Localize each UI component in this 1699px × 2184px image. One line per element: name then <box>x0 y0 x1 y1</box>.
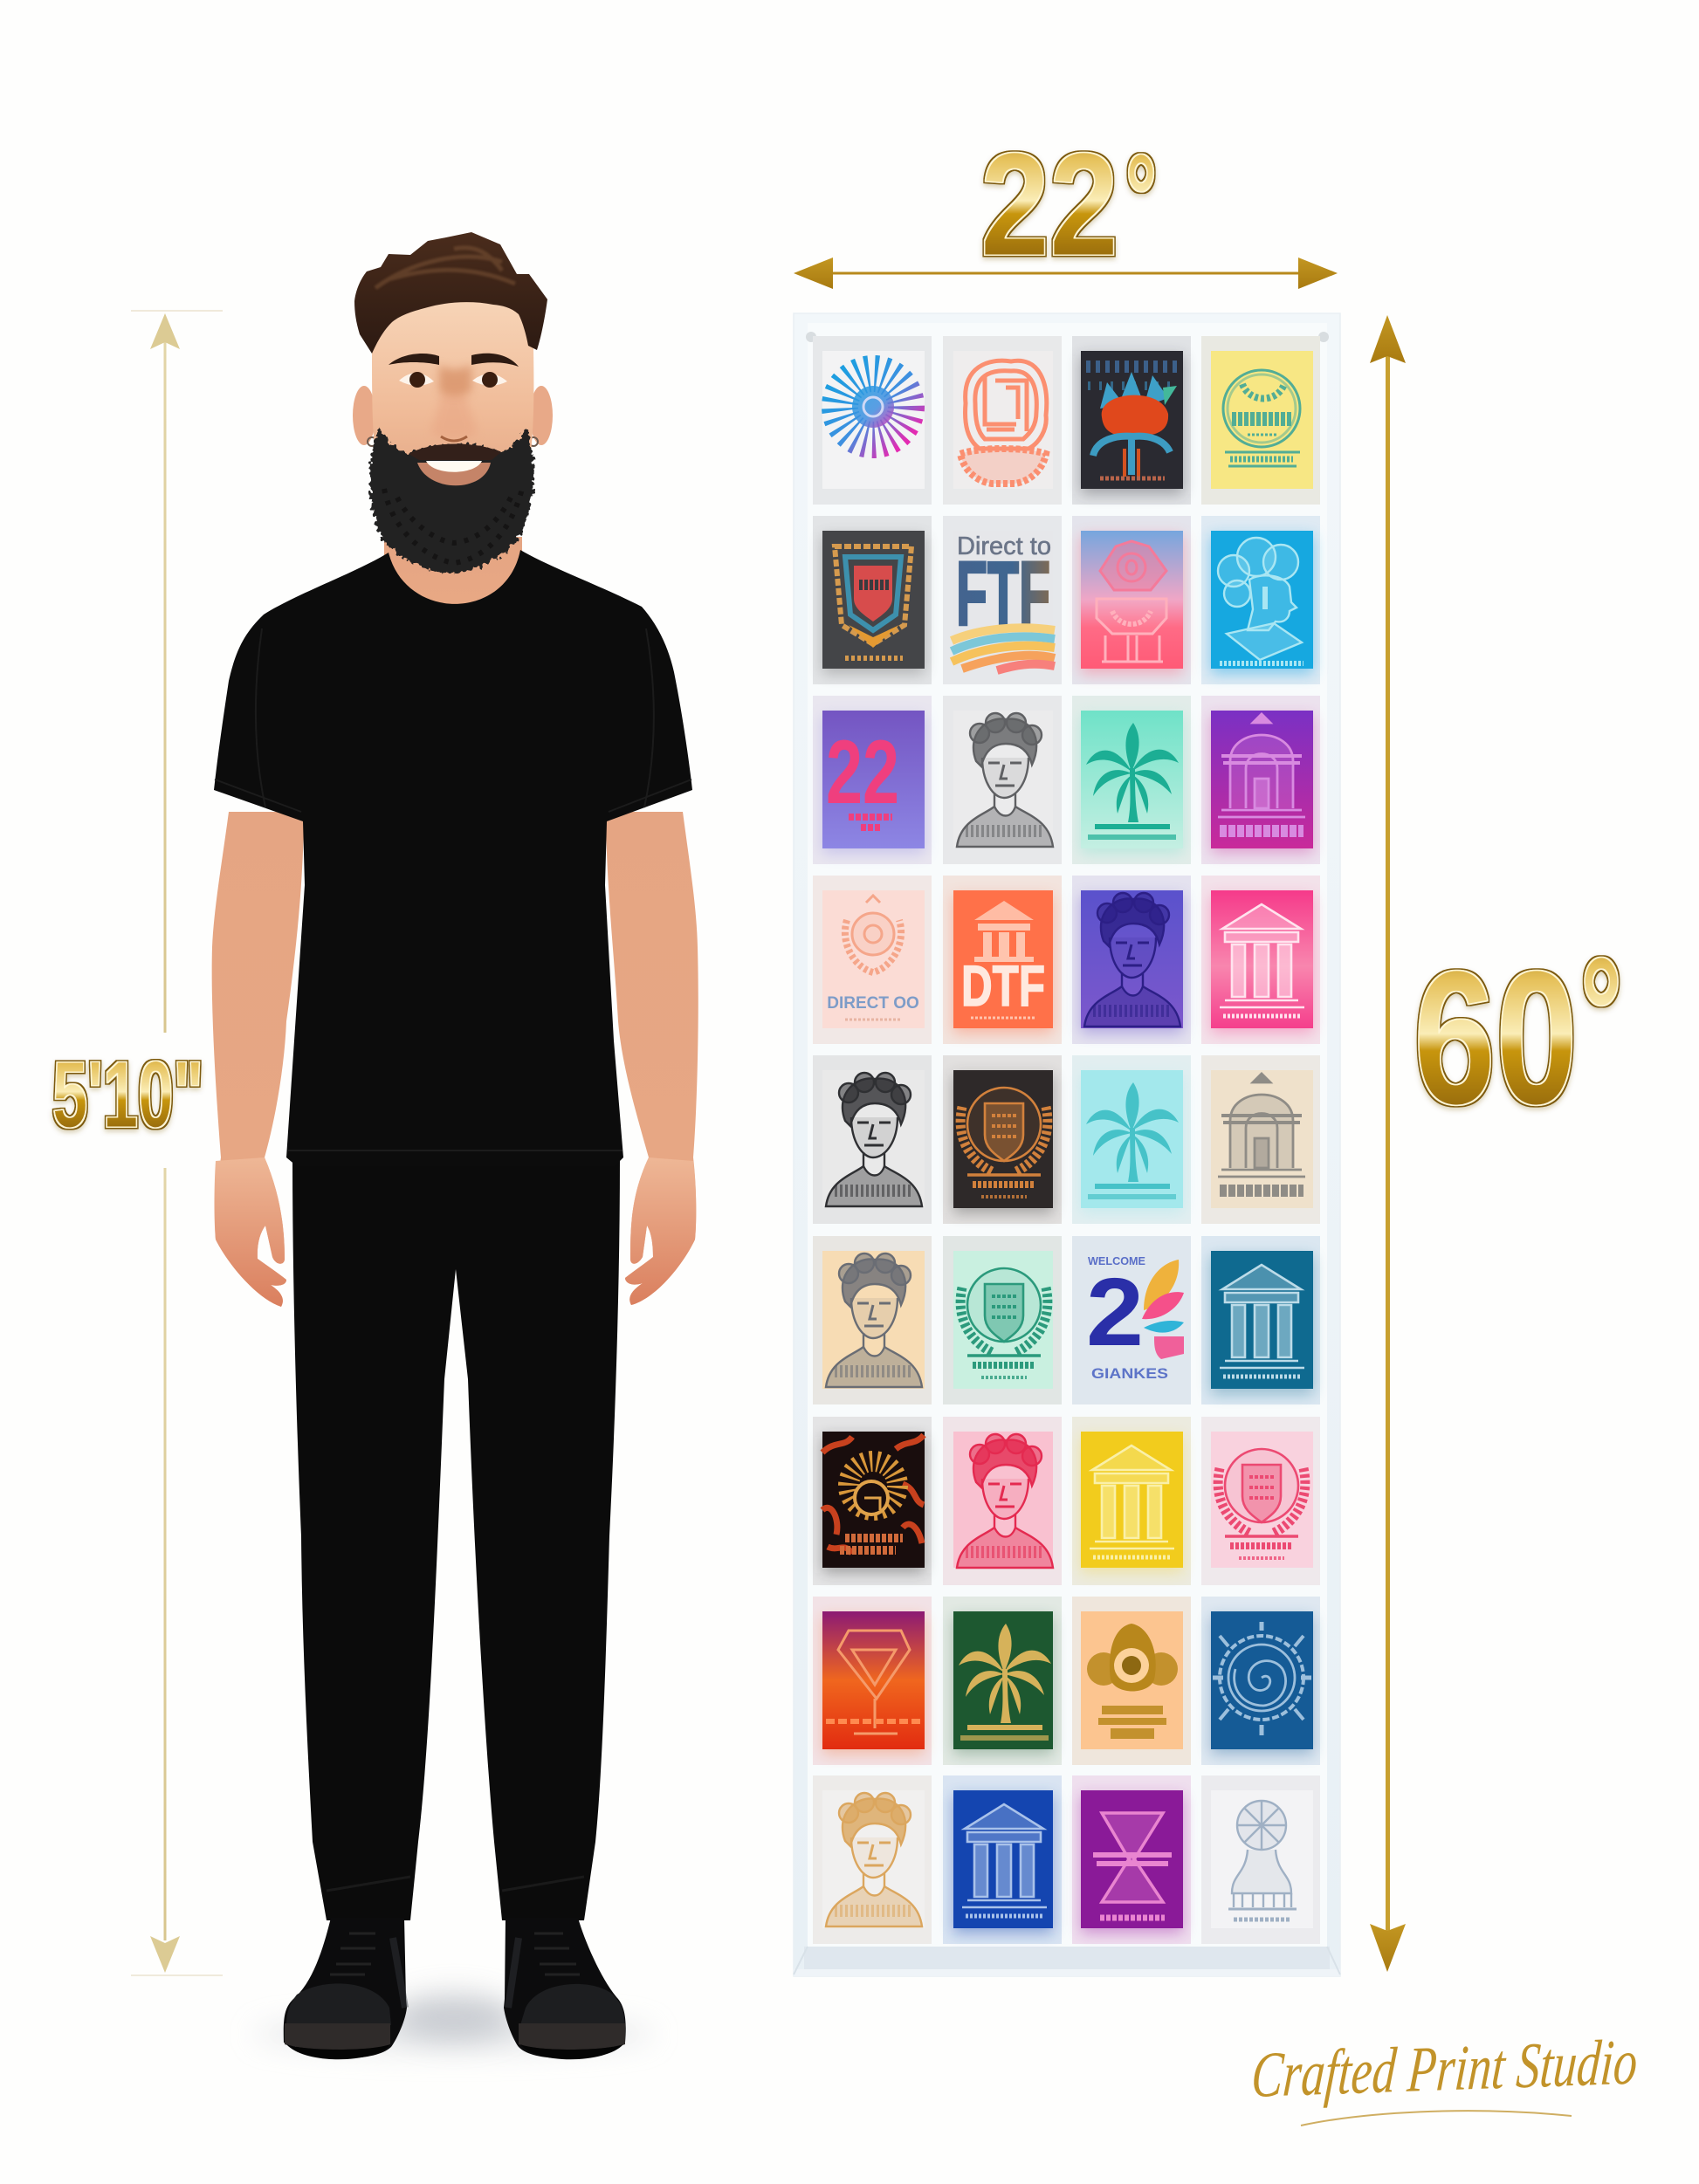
poster r1c3 dark flower <box>1072 336 1191 505</box>
poster r8c2 green palm <box>943 1597 1062 1765</box>
poster r6c4 teal temple <box>1201 1236 1320 1404</box>
label: 5'10": 5'10" <box>52 1041 203 1147</box>
poster r9c2 blue temple <box>943 1775 1062 1944</box>
poster r3c2 grey portrait <box>943 696 1062 864</box>
poster r2c2 Direct to FTF: FTF <box>956 544 1050 645</box>
label: 60 degrees: 60 <box>1414 932 1578 1144</box>
poster r4c4 pink temple <box>1201 876 1320 1044</box>
eyebrows <box>389 354 519 367</box>
eyes <box>399 372 507 388</box>
label: 22 degrees: ° <box>1125 128 1157 265</box>
poster r8c4 navy swirl <box>1201 1597 1320 1765</box>
poster r7c3 yellow temple <box>1072 1417 1191 1585</box>
right shoe <box>504 1918 626 2059</box>
poster r1c1 sunburst <box>813 336 932 505</box>
poster r8c1 sunset glass <box>813 1597 932 1765</box>
poster r3c1 22 <box>813 696 932 864</box>
poster r5c3 aqua palm <box>1072 1055 1191 1224</box>
poster r2c3 pink rose <box>1072 516 1191 684</box>
panel: acrylic display frame <box>794 313 1340 1976</box>
poster r4c3 violet portrait <box>1072 876 1191 1044</box>
poster r6c2 mint wreath <box>943 1236 1062 1404</box>
left shoe <box>284 1918 407 2059</box>
poster r5c2 black emblem <box>943 1055 1062 1224</box>
height dimension: 5'10" arrow <box>131 311 223 1975</box>
poster r4c2 DTF: DTF <box>961 953 1045 1018</box>
poster r5c1 dark portrait <box>813 1055 932 1224</box>
beard <box>369 428 534 574</box>
width dimension arrow <box>794 258 1338 289</box>
poster r2c4 blue bust <box>1201 516 1320 684</box>
poster r6c3 number 2 feathers: 2 <box>1086 1259 1144 1366</box>
trousers <box>292 1157 620 1920</box>
hair <box>354 232 547 354</box>
poster r5c4 cream arch <box>1201 1055 1320 1224</box>
ears <box>353 386 553 446</box>
poster r8c3 peach gold crest <box>1072 1597 1191 1765</box>
poster r2c2 Direct to FTF <box>943 516 1062 684</box>
poster r6c3 number 2 feathers: GIANKES <box>1091 1365 1168 1382</box>
poster r9c4 white bust <box>1201 1775 1320 1944</box>
poster r2c1 shield <box>813 516 932 684</box>
poster r7c4 pink emblem <box>1201 1417 1320 1585</box>
poster r4c1 peach emblem <box>813 876 932 1044</box>
poster r3c4 violet arch <box>1201 696 1320 864</box>
poster r2c2 Direct to FTF: Direct to <box>957 532 1051 560</box>
label: 60 degrees: ° <box>1580 925 1622 1101</box>
poster r6c1 cream portrait <box>813 1236 932 1404</box>
T-shirt <box>214 550 692 1166</box>
arms <box>212 812 698 1307</box>
person <box>212 232 698 2059</box>
height dimension arrow: 60 <box>1370 315 1406 1972</box>
label: 22 degrees: 22 <box>980 122 1118 286</box>
poster r7c1 black sun <box>813 1417 932 1585</box>
poster r6c3 number 2 feathers: WELCOME <box>1088 1254 1145 1267</box>
floor shadow <box>253 1994 655 2051</box>
poster r9c1 gold portrait <box>813 1775 932 1944</box>
poster r6c3 number 2 feathers <box>1072 1236 1191 1404</box>
poster r4c1 peach emblem: DIRECT OO <box>827 994 919 1013</box>
poster r3c3 teal palm <box>1072 696 1191 864</box>
poster r7c2 pink portrait <box>943 1417 1062 1585</box>
poster r1c4 yellow seal <box>1201 336 1320 505</box>
poster r9c3 magenta X <box>1072 1775 1191 1944</box>
poster r4c2 DTF <box>943 876 1062 1044</box>
poster r1c2 orange maze <box>943 336 1062 505</box>
neck <box>384 537 522 606</box>
poster r3c1 22: 22 <box>826 722 899 823</box>
face <box>372 297 533 528</box>
